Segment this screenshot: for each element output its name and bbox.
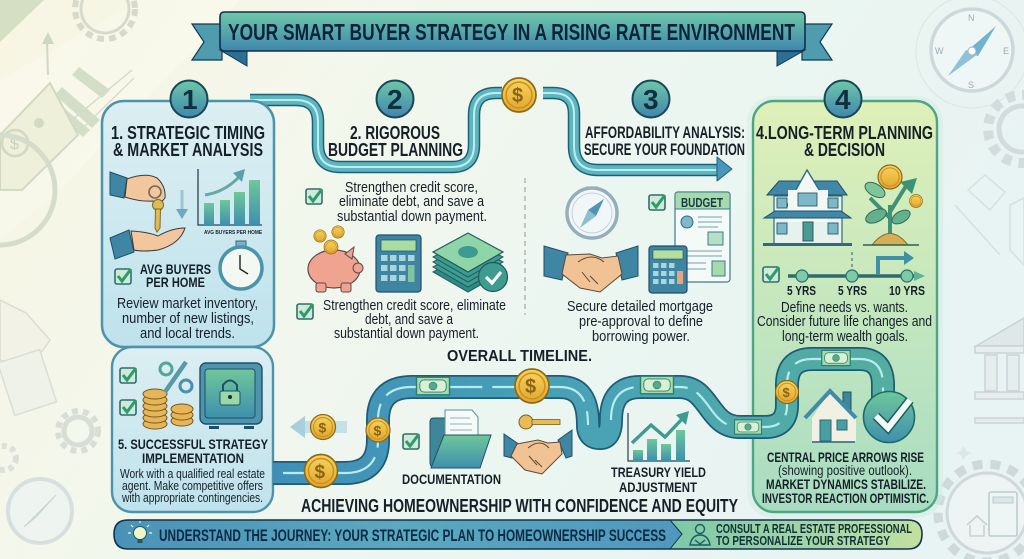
consult message: CONSULT A REAL ESTATE PROFESSIONAL — [716, 522, 912, 536]
icon: checkbox — [115, 269, 131, 284]
body text — [337, 179, 487, 225]
body text: long-term wealth goals. — [782, 328, 908, 345]
panel 2: budget planning: BUDGET PLANNING — [328, 140, 463, 160]
badge 4: 4 — [835, 84, 851, 115]
heading: AFFORDABILITY ANALYSIS: — [585, 124, 745, 142]
badge 3: 3 — [643, 84, 659, 115]
badge 1: 1 — [182, 84, 198, 115]
body text: Strengthen credit score, eliminate — [323, 297, 506, 314]
icon: coins on timeline — [304, 369, 798, 488]
icon: checkbox — [763, 267, 779, 282]
chart: avg buyers per home: AVG BUYERS PER HOME — [204, 230, 262, 236]
icon: calculator — [649, 246, 687, 293]
icon: checkbox — [403, 434, 419, 449]
consult message — [716, 522, 912, 548]
panel 3: affordability: SECURE YOUR FOUNDATION — [584, 141, 745, 159]
body text: substantial down payment. — [334, 325, 479, 342]
icon: checkbox — [649, 195, 665, 210]
icon: handshake — [544, 246, 638, 292]
documentation block — [402, 410, 501, 487]
body text — [120, 467, 265, 505]
icon: compass — [567, 187, 617, 238]
heading: 2. RIGOROUS — [350, 123, 440, 143]
body text: with appropriate contingencies. — [121, 491, 263, 505]
icon: checkbox — [120, 368, 136, 383]
body text: Define needs vs. wants. — [781, 299, 908, 316]
icon: checkbox — [306, 189, 322, 204]
icon: money plant — [862, 165, 922, 245]
panel 2: budget planning — [297, 123, 508, 342]
badge 2 — [376, 80, 414, 118]
closing statement: ACHIEVING HOMEOWNERSHIP WITH CONFIDENCE AND EQUITY — [301, 495, 739, 516]
body text: eliminate debt, and save a — [339, 193, 485, 210]
chart: avg buyers per home — [198, 169, 262, 236]
documentation block: DOCUMENTATION — [402, 471, 501, 487]
overall timeline heading: OVERALL TIMELINE. — [447, 348, 592, 365]
panel 1: strategic timing: & MARKET ANALYSIS — [113, 140, 263, 160]
heading: 1. STRATEGIC TIMING — [111, 123, 265, 143]
avg buyers label: AVG BUYERS — [140, 261, 211, 277]
outlook text: INVESTOR REACTION OPTIMISTIC. — [762, 490, 929, 506]
icon: coin on upper path: $ — [512, 85, 523, 107]
panel 5: successful strategy — [112, 347, 273, 512]
icon: coin stacks and percent — [143, 362, 193, 429]
outlook text — [762, 449, 929, 506]
footer message: UNDERSTAND THE JOURNEY: YOUR STRATEGIC PLAN TO HOMEOWNERSHIP SUCCESS — [159, 526, 666, 545]
chart: treasury yield — [628, 411, 690, 461]
treasury label: ADJUSTMENT — [619, 479, 697, 495]
timeline — [787, 251, 925, 298]
heading — [118, 436, 269, 466]
background decor: right compass, gears, bank — [916, 0, 1024, 559]
heading: 4.LONG-TERM PLANNING — [756, 123, 933, 143]
background decor: right compass, gears, bank: E — [1003, 46, 1009, 56]
icon: stopwatch — [220, 241, 262, 289]
background decor: left finance sketches: $ — [10, 136, 19, 153]
body text: Secure detailed mortgage — [567, 298, 713, 315]
background decor: left finance sketches — [0, 0, 240, 543]
body text: debt, and save a — [365, 311, 454, 328]
icon: coins on timeline: $ — [314, 462, 326, 483]
icon: checkbox — [120, 400, 136, 415]
body text: agent. Make competitive offers — [122, 479, 263, 493]
arrow: left return — [290, 416, 347, 438]
icon: budget sheet — [675, 192, 730, 282]
body text: pre-approval to define — [579, 313, 703, 330]
icon: coins on timeline: $ — [525, 376, 536, 398]
body text — [757, 299, 932, 345]
body text: Review market inventory, — [117, 295, 258, 312]
panel 4: long-term planning: & DECISION — [804, 140, 885, 160]
body text: number of new listings, — [122, 310, 254, 327]
treasury label — [611, 464, 706, 495]
icon: safe — [200, 363, 262, 429]
icon: bills on timeline — [416, 350, 850, 434]
icon: calculator — [376, 235, 421, 292]
icon: key and handshake — [504, 415, 572, 474]
background decor: right compass, gears, bank: W — [935, 46, 944, 56]
badge 1 — [170, 80, 208, 118]
footer bar — [114, 520, 922, 549]
icon: budget sheet: BUDGET — [681, 196, 723, 210]
background decor: right compass, gears, bank: S — [968, 80, 974, 90]
body text: Consider future life changes and — [757, 313, 932, 330]
heading: 5. SUCCESSFUL STRATEGY — [118, 436, 269, 452]
body text — [567, 298, 713, 345]
icon: coins on timeline: $ — [374, 422, 382, 438]
arrow: upper journey path — [250, 93, 732, 181]
icon: consultant — [690, 524, 710, 545]
icon: light bulb — [128, 521, 152, 543]
title banner — [192, 12, 832, 66]
badge 4 — [824, 80, 862, 118]
icon: hands passing key — [110, 172, 188, 259]
icon: money stack — [433, 233, 508, 292]
body text: and local trends. — [140, 325, 235, 342]
badge 3 — [632, 80, 670, 118]
badge 2: 2 — [387, 84, 403, 115]
heading: IMPLEMENTATION — [142, 450, 244, 466]
icon: coins on timeline: $ — [782, 385, 790, 400]
panel 3: affordability — [525, 124, 745, 345]
body text — [117, 295, 258, 342]
icon: coin on upper path — [502, 78, 536, 112]
background decor: right compass, gears, bank: N — [968, 13, 974, 23]
outlook text: (showing positive outlook). — [778, 463, 912, 478]
timeline: 5 YRS — [838, 283, 867, 298]
icon: coins on timeline: $ — [318, 420, 326, 436]
body text: Strengthen credit score, — [345, 179, 478, 196]
panel 4: long-term planning — [747, 96, 943, 518]
panel 1: strategic timing — [102, 101, 274, 347]
timeline: 5 YRS — [787, 283, 816, 298]
icon: house — [763, 170, 852, 246]
icon: check circle — [864, 392, 914, 442]
body text — [323, 297, 506, 342]
arrow: lower timeline road — [273, 359, 883, 473]
icon: folder — [430, 410, 491, 468]
body text: substantial down payment. — [337, 208, 487, 225]
consult message: TO PERSONALIZE YOUR STRATEGY — [716, 534, 891, 548]
icon: piggy bank — [308, 226, 363, 292]
icon: checkbox — [297, 304, 313, 319]
body text: borrowing power. — [592, 328, 690, 345]
outlook text: MARKET DYNAMICS STABILIZE. — [766, 476, 926, 492]
outlook text: CENTRAL PRICE ARROWS RISE — [767, 449, 924, 465]
title: YOUR SMART BUYER STRATEGY IN A RISING RATE ENVIRONMENT — [228, 19, 795, 45]
timeline: 10 YRS — [889, 283, 925, 298]
avg buyers label: PER HOME — [146, 274, 205, 290]
treasury label: TREASURY YIELD — [611, 464, 706, 480]
icon: house outlook — [805, 391, 856, 442]
avg buyers label — [140, 261, 211, 290]
body text: Work with a qualified real estate — [120, 467, 265, 481]
